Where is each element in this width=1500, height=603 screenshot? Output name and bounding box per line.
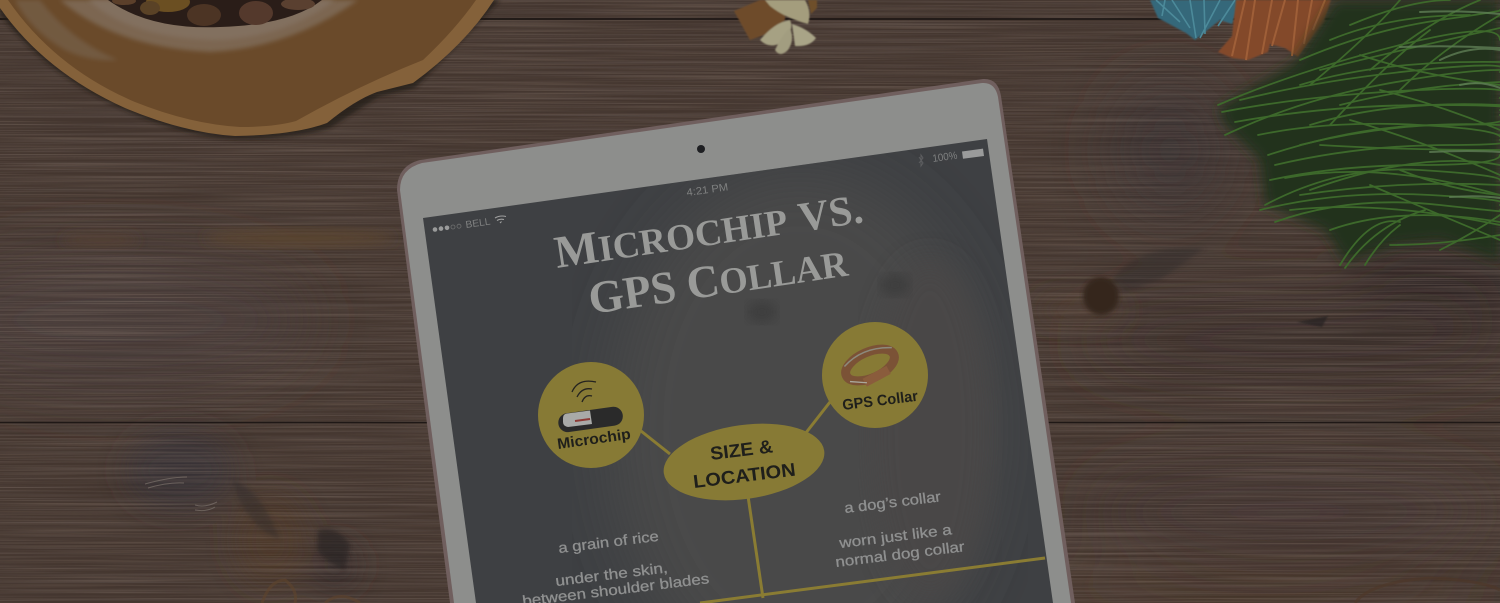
text: collar size and location: worn just like a: [837, 522, 954, 552]
node: microchip: [538, 362, 644, 468]
tablet body: [397, 79, 1075, 603]
text: microchip size and location: a grain of rice: [558, 529, 660, 557]
icon: microchip with signal waves: [557, 381, 624, 433]
node: microchip: Microchip: [556, 426, 632, 453]
status bar: BELL: [465, 217, 492, 231]
status bar: 100%: [932, 150, 958, 165]
title: MICROCHIP VS.: [551, 181, 866, 278]
node: GPS collar: GPS Collar: [841, 388, 919, 414]
tablet: [397, 79, 1075, 603]
title: [551, 181, 866, 324]
dog food bowl: [0, 0, 500, 139]
icon: collar: [841, 341, 901, 389]
camera: [697, 145, 705, 153]
connector lines: [641, 402, 1045, 603]
status bar: 4:21 PM: [686, 181, 729, 199]
kibble: [108, 0, 322, 27]
tablet screen: [423, 139, 1053, 603]
pine grass bunch: [1218, 0, 1500, 268]
text: microchip size and location: [522, 529, 710, 603]
node: size and location: SIZE &: [709, 435, 774, 464]
rope toy tassels: [1150, 0, 1331, 60]
rawhide treat: [734, 0, 817, 54]
status bar: [433, 149, 984, 232]
text: collar size and location: a dog’s collar: [844, 489, 942, 517]
wood knots: [145, 248, 1500, 603]
node: size and location: LOCATION: [692, 459, 797, 492]
text: microchip size and location: under the skin,: [555, 560, 669, 590]
dog photo on screen: [610, 170, 990, 603]
node: GPS collar: [822, 322, 928, 428]
node: size and location: [659, 414, 829, 510]
text: collar size and location: normal dog collar: [835, 539, 966, 571]
tablet bezel: [400, 83, 1071, 603]
title: GPS COLLAR: [585, 235, 852, 324]
text: collar size and location: [835, 489, 966, 571]
